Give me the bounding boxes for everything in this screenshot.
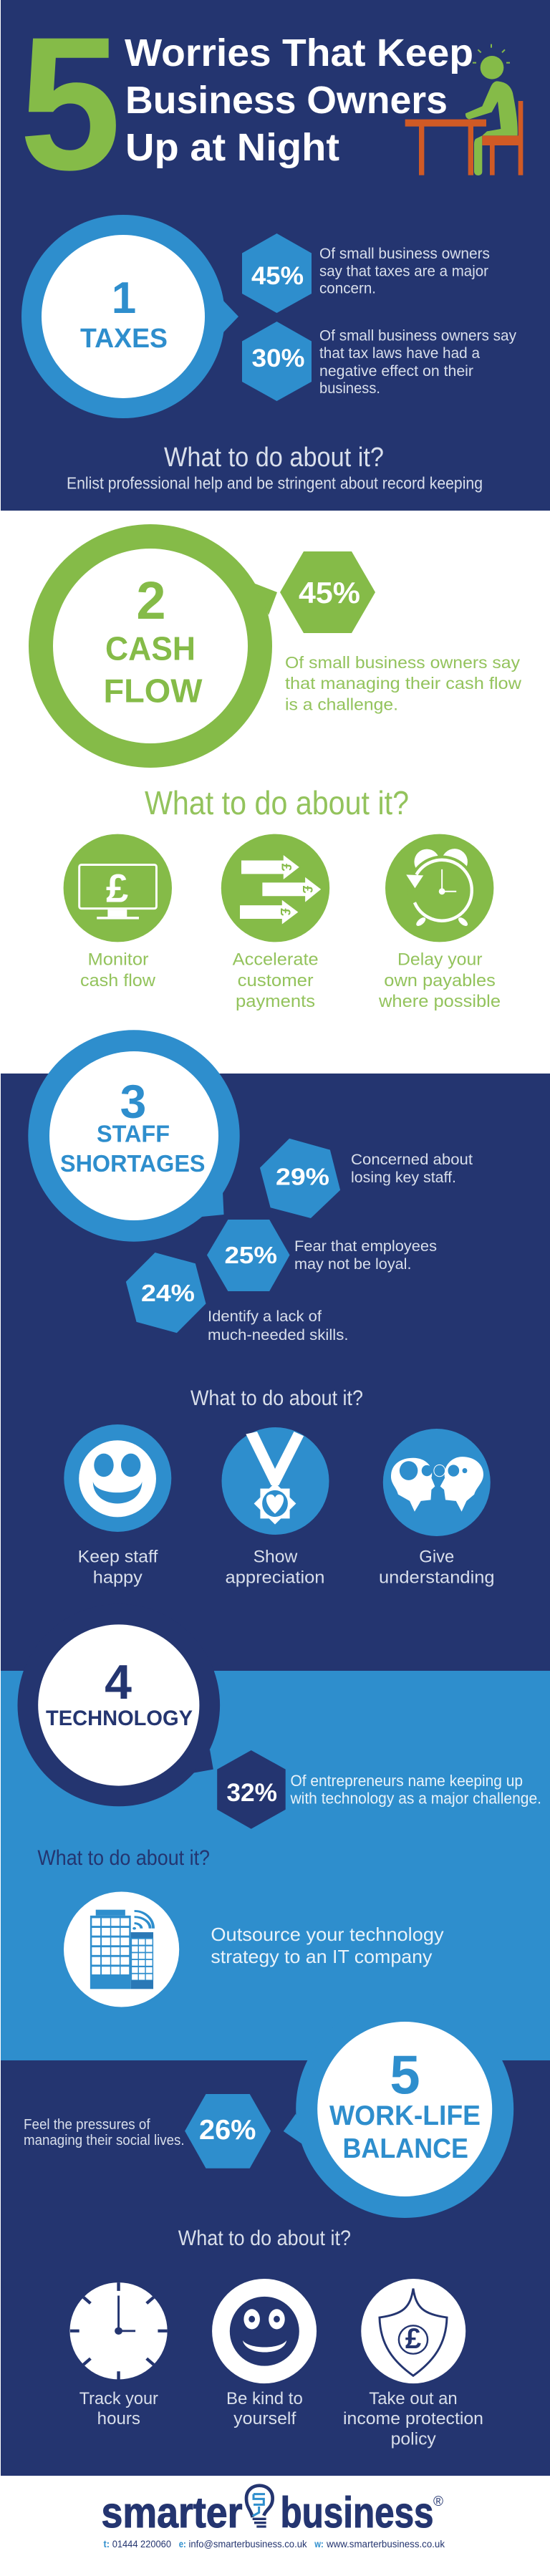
contact details: t: bbox=[103, 2539, 110, 2550]
number and heading: TECHNOLOGY bbox=[46, 1707, 193, 1730]
icon: clock bbox=[69, 2282, 168, 2380]
speech bubble ring bbox=[28, 1030, 240, 1242]
label: delay payables: Delay your bbox=[397, 950, 483, 970]
number and heading: WORK-LIFE bbox=[329, 2100, 481, 2131]
stat 45%: concern. bbox=[319, 281, 376, 296]
label: income protection: policy bbox=[391, 2429, 436, 2449]
stat 29%: Concerned about bbox=[351, 1152, 473, 1168]
stat 26%: managing their social lives. bbox=[24, 2133, 185, 2148]
number and heading: BALANCE bbox=[342, 2133, 468, 2164]
label: be kind to yourself: Be kind to bbox=[226, 2389, 303, 2408]
stat 32%: with technology as a major challenge. bbox=[290, 1789, 541, 1808]
stat 45% bbox=[242, 233, 490, 313]
stat 29% bbox=[260, 1139, 473, 1218]
label: be kind to yourself: yourself bbox=[233, 2409, 296, 2428]
number and heading bbox=[329, 2045, 481, 2164]
panel: technology bbox=[17, 1604, 541, 2007]
label: accelerate customer payments bbox=[233, 950, 319, 1011]
label: accelerate customer payments: customer bbox=[238, 971, 314, 990]
label: give understanding: Give bbox=[419, 1547, 454, 1567]
speech bubble ring bbox=[284, 2000, 513, 2218]
panel: cash flow bbox=[29, 524, 522, 1011]
label: show appreciation: appreciation bbox=[225, 1568, 325, 1587]
contact details bbox=[103, 2539, 445, 2550]
label: delay payables: own payables bbox=[384, 971, 496, 990]
number and heading: SHORTAGES bbox=[60, 1150, 205, 1177]
label: be kind to yourself bbox=[226, 2389, 303, 2428]
title text: Business Owners bbox=[125, 79, 448, 122]
title bbox=[19, 0, 473, 210]
stat 32% bbox=[217, 1750, 541, 1829]
wordmark: business bbox=[281, 2489, 434, 2537]
stat 26%: Feel the pressures of bbox=[24, 2117, 150, 2133]
label: accelerate customer payments: payments bbox=[236, 992, 315, 1011]
what to do heading: What to do about it? bbox=[145, 784, 409, 821]
icon: office building with wifi bbox=[64, 1892, 179, 2007]
number and heading: 4 bbox=[105, 1655, 132, 1709]
action text: strategy to an IT company bbox=[211, 1946, 432, 1967]
label: income protection: Take out an bbox=[369, 2389, 458, 2408]
icon: smiley bbox=[64, 1424, 171, 1532]
contact details: w: bbox=[314, 2539, 324, 2550]
number and heading: CASH bbox=[105, 630, 196, 667]
panel: staff shortages bbox=[28, 1030, 495, 1587]
label: track your hours bbox=[79, 2389, 158, 2428]
label: income protection bbox=[343, 2389, 483, 2449]
contact details: e: bbox=[179, 2539, 186, 2550]
icon: arrows with pound signs: £ bbox=[277, 908, 292, 916]
label: show appreciation: Show bbox=[254, 1547, 298, 1567]
panel: taxes bbox=[21, 215, 516, 493]
label: show appreciation bbox=[225, 1547, 325, 1587]
what to do heading: What to do about it? bbox=[178, 2227, 351, 2250]
label: delay payables bbox=[378, 950, 501, 1011]
number and heading bbox=[46, 1655, 193, 1730]
icon: alarm clock bbox=[385, 834, 493, 942]
number and heading: FLOW bbox=[103, 672, 203, 709]
stat 32%: 32% bbox=[226, 1779, 277, 1807]
number and heading: 3 bbox=[120, 1075, 146, 1128]
number and heading bbox=[60, 1075, 205, 1177]
icon: light bulb bbox=[246, 2486, 273, 2527]
stat 24%: Identify a lack of bbox=[208, 1308, 322, 1325]
label: accelerate customer payments: Accelerate bbox=[233, 950, 319, 970]
title text: Worries That Keep bbox=[125, 32, 473, 74]
what to do heading: What to do about it? bbox=[37, 1846, 210, 1870]
stat 24%: 24% bbox=[141, 1280, 195, 1306]
label: income protection: income protection bbox=[343, 2409, 483, 2428]
registered mark: ® bbox=[433, 2494, 443, 2509]
stat 30%: Of small business owners say bbox=[319, 328, 516, 344]
label: monitor cash flow: cash flow bbox=[80, 971, 156, 990]
icon: shield bbox=[361, 2279, 465, 2383]
what to do: Enlist professional help and be stringent about record keeping bbox=[67, 474, 483, 493]
icon: two heads bbox=[383, 1429, 491, 1536]
stat 45%: 45% bbox=[299, 576, 360, 609]
stat 32%: Of entrepreneurs name keeping up bbox=[291, 1772, 523, 1790]
label: keep staff happy: happy bbox=[93, 1568, 143, 1587]
stat 30%: negative effect on their bbox=[319, 363, 473, 380]
speech bubble ring bbox=[21, 215, 238, 418]
title text: Up at Night bbox=[125, 126, 339, 169]
speech bubble ring bbox=[29, 524, 277, 768]
label: keep staff happy bbox=[78, 1547, 158, 1587]
big number 5: 5 bbox=[19, 0, 121, 210]
contact details: 01444 220060 bbox=[112, 2539, 171, 2550]
stat 25%: Fear that employees bbox=[294, 1238, 437, 1255]
icon: worried person at desk bbox=[405, 44, 523, 175]
number and heading: TAXES bbox=[80, 324, 168, 354]
contact details: www.smarterbusiness.co.uk bbox=[326, 2539, 445, 2550]
stat 29%: 29% bbox=[276, 1163, 329, 1190]
stat 24% bbox=[126, 1253, 349, 1344]
stat description: Of small business owners say bbox=[285, 653, 520, 672]
number and heading: 5 bbox=[390, 2045, 420, 2105]
what to do bbox=[67, 443, 483, 493]
stat 25%: 25% bbox=[225, 1242, 277, 1268]
stat 25% bbox=[207, 1220, 437, 1291]
label: track your hours: hours bbox=[97, 2409, 140, 2428]
action text bbox=[211, 1924, 444, 1967]
label: give understanding bbox=[379, 1547, 495, 1587]
label: monitor cash flow: Monitor bbox=[87, 950, 149, 970]
contact details: info@smarterbusiness.co.uk bbox=[189, 2539, 307, 2550]
icon: arrows with pound signs: £ bbox=[278, 864, 294, 872]
stat 30% bbox=[242, 322, 516, 401]
stat 26%: 26% bbox=[199, 2115, 256, 2146]
number and heading: 1 bbox=[112, 274, 136, 323]
stat 45%: say that taxes are a major bbox=[319, 264, 488, 279]
stat 45% bbox=[280, 551, 375, 633]
stat 25%: may not be loyal. bbox=[294, 1256, 411, 1273]
stat 30%: business. bbox=[319, 380, 380, 397]
logo: smarter business bbox=[102, 2486, 445, 2550]
title text bbox=[125, 32, 473, 169]
icon: monitor: £ bbox=[106, 865, 128, 911]
label: monitor cash flow bbox=[80, 950, 156, 990]
stat 45%: 45% bbox=[251, 262, 304, 290]
stat 30%: 30% bbox=[252, 344, 305, 372]
wordmark: smarter bbox=[102, 2489, 242, 2537]
icon: arrows with pound signs bbox=[221, 834, 329, 942]
label: delay payables: where possible bbox=[378, 992, 501, 1011]
what to do heading: What to do about it? bbox=[190, 1386, 363, 1410]
icon: shield pound sign: £ bbox=[405, 2323, 421, 2355]
number and heading: 2 bbox=[136, 571, 166, 630]
action text: Outsource your technology bbox=[211, 1924, 444, 1945]
wordmark bbox=[102, 2489, 434, 2537]
number and heading bbox=[80, 274, 168, 354]
icon: medal bbox=[222, 1427, 329, 1535]
label: give understanding: understanding bbox=[379, 1568, 495, 1587]
stat 45%: Of small business owners bbox=[319, 246, 490, 262]
stat 29%: losing key staff. bbox=[351, 1169, 456, 1186]
panel: work-life balance bbox=[24, 2000, 513, 2449]
label: track your hours: Track your bbox=[79, 2389, 158, 2408]
icon: arrows with pound signs: £ bbox=[299, 886, 314, 894]
stat 30%: that tax laws have had a bbox=[319, 345, 480, 362]
stat description bbox=[285, 653, 522, 713]
label: keep staff happy: Keep staff bbox=[78, 1547, 158, 1567]
icon: monitor bbox=[64, 834, 172, 942]
icon: kind smiley bbox=[212, 2279, 317, 2383]
number and heading bbox=[103, 571, 203, 709]
speech bubble ring bbox=[17, 1604, 220, 1806]
number and heading: STAFF bbox=[97, 1120, 170, 1147]
stat 24%: much-needed skills. bbox=[208, 1327, 348, 1344]
stat description: is a challenge. bbox=[285, 695, 398, 713]
stat 26% bbox=[24, 2094, 271, 2169]
what to do: What to do about it? bbox=[164, 443, 384, 473]
stat description: that managing their cash flow bbox=[285, 674, 522, 693]
